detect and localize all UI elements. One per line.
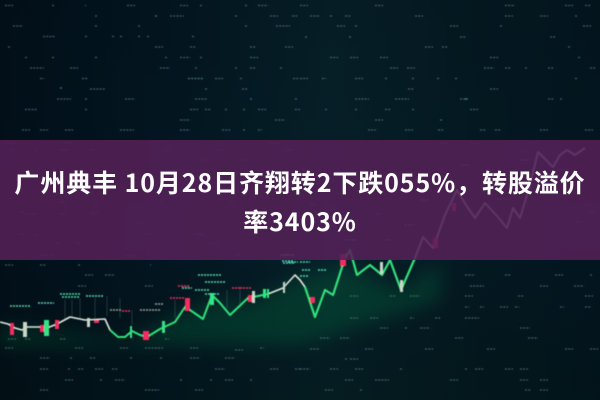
title [14, 164, 586, 239]
title: 率3403% [243, 203, 357, 239]
green up segments [110, 294, 268, 337]
price line faint labels [345, 160, 530, 240]
vertical volume hairlines [65, 280, 285, 325]
candlesticks [10, 203, 456, 340]
light price line [0, 317, 110, 330]
glow under chart line [0, 262, 440, 345]
faint specks shown through the band [5, 143, 596, 256]
price line chart [0, 148, 585, 340]
green cluster labels [10, 255, 326, 311]
title band [0, 140, 600, 260]
title: 广州典丰 10月28日齐翔转2下跌055%，转股溢价 [14, 164, 586, 200]
